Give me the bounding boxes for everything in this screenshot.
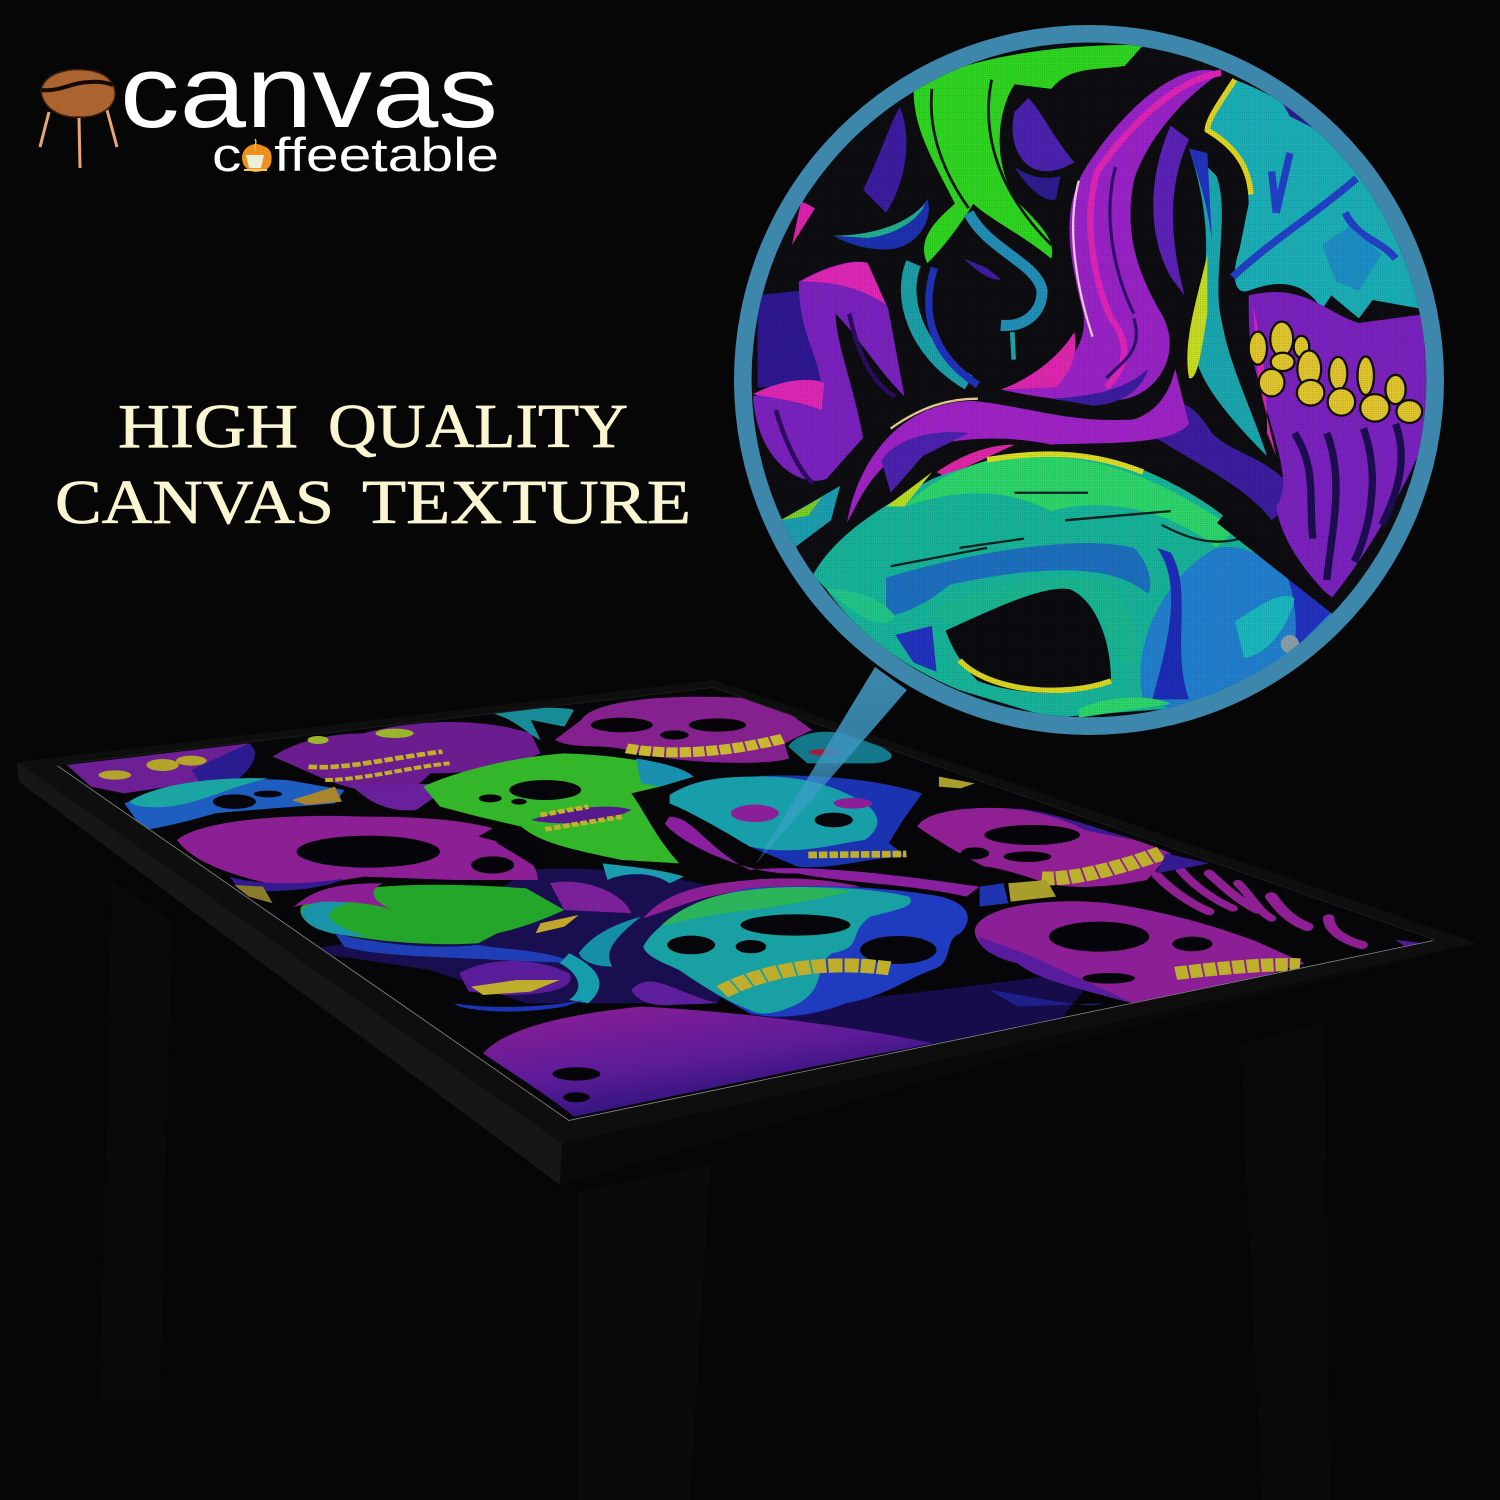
heading: CANVAS (55, 469, 334, 537)
bottom purple skull spanning (483, 1007, 933, 1117)
green strand (914, 45, 1143, 263)
purple skull lower right (975, 901, 1305, 1003)
sub wordmark: coffeetable (212, 128, 499, 181)
table legs (100, 880, 1330, 1500)
icon: coffee bean table (40, 70, 117, 168)
green skull lower (300, 885, 564, 944)
infographic canvas (17, 25, 1444, 1185)
big skull (813, 457, 1336, 718)
heading: QUALITY (328, 393, 628, 461)
right teal column (1189, 149, 1267, 456)
big purple skull (177, 816, 538, 886)
table frame (17, 680, 1477, 1185)
dark violet filler strands (320, 868, 732, 1004)
teeth (1249, 322, 1422, 423)
top purple skull spanning (555, 697, 812, 763)
magnified canvas texture circle (730, 20, 1450, 740)
green skull (423, 753, 694, 863)
hair strands (1157, 870, 1362, 945)
teal skull (1207, 80, 1423, 318)
heading (55, 393, 691, 537)
purple mouth with hair (1249, 292, 1428, 598)
teal skull spanning (670, 775, 922, 867)
big purple swirl (1001, 70, 1221, 401)
left dark strands (863, 107, 906, 213)
big teal skull spanning (643, 886, 968, 1017)
right side skulls (788, 732, 1424, 1007)
callout pointer beam (755, 667, 907, 865)
canvas table top artwork (57, 688, 1434, 1120)
logo (40, 34, 499, 181)
lower swirl (1157, 404, 1284, 520)
heading: TEXTURE (362, 469, 691, 537)
purple strands spanning (665, 817, 980, 897)
wordmark: canvas (120, 34, 498, 149)
skull upper left (67, 743, 249, 793)
heading: HIGH (118, 393, 298, 461)
icon: coffee cup (242, 139, 270, 172)
